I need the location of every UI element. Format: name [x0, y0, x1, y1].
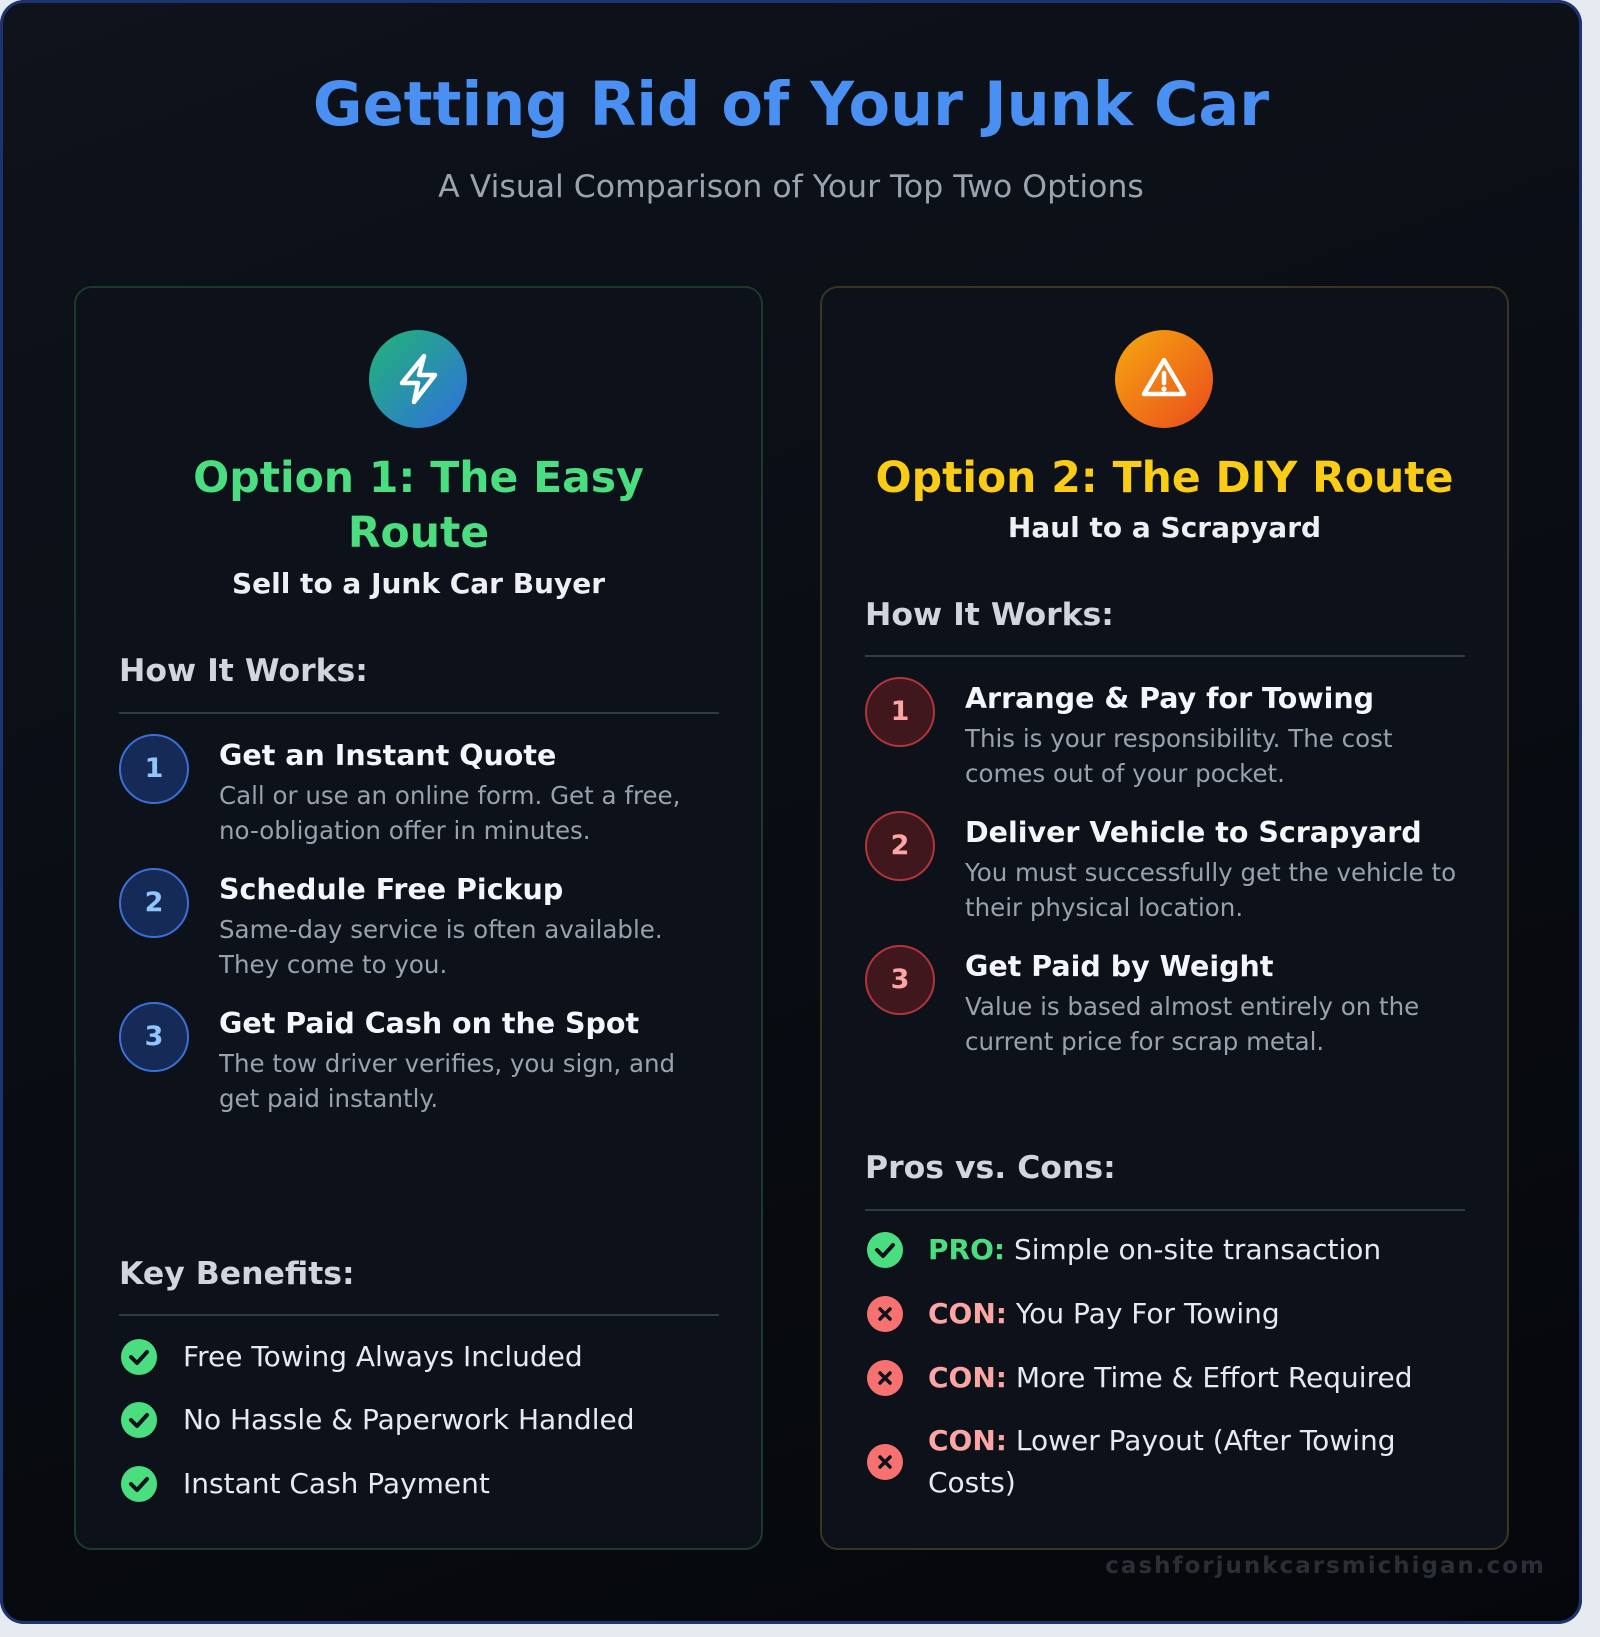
panel: option 1: [74, 286, 763, 1550]
step 3: Get Paid by Weight: [965, 950, 1273, 983]
section heading: pros vs cons: Pros vs. Cons:: [865, 1150, 1116, 1186]
subheading: Haul to a Scrapyard: [1008, 511, 1321, 544]
pro item: PRO: Simple on-site transaction: [928, 1233, 1381, 1266]
step 2: [119, 868, 663, 979]
con item 3: [867, 1424, 1396, 1499]
step 2: 2: [891, 830, 909, 861]
subheading: Sell to a Junk Car Buyer: [232, 567, 605, 600]
step 2: 2: [145, 887, 163, 918]
step 3: [119, 1002, 675, 1113]
step 1: [119, 734, 680, 845]
step 3: The tow driver verifies, you sign, and: [219, 1049, 675, 1078]
step 2: Schedule Free Pickup: [219, 873, 563, 906]
subtitle: A Visual Comparison of Your Top Two Options: [438, 169, 1144, 205]
step 1: Get an Instant Quote: [219, 739, 556, 772]
step 3: [865, 945, 1419, 1056]
step 1: Call or use an online form. Get a free,: [219, 781, 680, 810]
step 3: current price for scrap metal.: [965, 1027, 1324, 1056]
benefits list: [121, 1339, 634, 1502]
step 3: get paid instantly.: [219, 1084, 438, 1113]
step 1: This is your responsibility. The cost: [965, 724, 1392, 753]
step 3: Value is based almost entirely on the: [965, 992, 1419, 1021]
step 2: Same-day service is often available.: [219, 915, 663, 944]
watermark: cashforjunkcarsmichigan.com: [1105, 1553, 1546, 1579]
step 1: [865, 677, 1392, 788]
panel: option 2: [820, 286, 1509, 1550]
title: Getting Rid of Your Junk Car: [313, 70, 1269, 140]
step 3: Get Paid Cash on the Spot: [219, 1007, 639, 1040]
heading: option 1: Option 1: The Easy: [193, 454, 644, 503]
step 1: comes out of your pocket.: [965, 759, 1285, 788]
benefit 2: No Hassle & Paperwork Handled: [183, 1403, 634, 1436]
icon: lightning bolt: [369, 330, 467, 428]
step 1: no-obligation offer in minutes.: [219, 816, 591, 845]
benefit 3: Instant Cash Payment: [183, 1467, 490, 1500]
heading: option 1: [193, 454, 644, 558]
section heading: key benefits: Key Benefits:: [119, 1256, 355, 1292]
con item 1: CON: You Pay For Towing: [928, 1297, 1280, 1330]
step 3: 3: [145, 1021, 163, 1052]
pros cons list: [867, 1232, 1412, 1499]
step 3: 3: [891, 964, 909, 995]
con item 2: CON: More Time & Effort Required: [928, 1361, 1412, 1394]
con item 3: CON: Lower Payout (After Towing: [928, 1424, 1396, 1457]
step 1: Arrange & Pay for Towing: [965, 682, 1374, 715]
section heading: how it works: How It Works:: [865, 597, 1114, 633]
step 1: 1: [891, 696, 909, 727]
step 1: 1: [145, 753, 163, 784]
step 2: their physical location.: [965, 893, 1243, 922]
benefit 1: Free Towing Always Included: [183, 1340, 583, 1373]
step 2: You must successfully get the vehicle to: [965, 858, 1456, 887]
step 2: [865, 811, 1456, 922]
section heading: how it works: How It Works:: [119, 653, 368, 689]
step 2: Deliver Vehicle to Scrapyard: [965, 816, 1422, 849]
step 2: They come to you.: [219, 950, 447, 979]
heading: option 2: Option 2: The DIY Route: [876, 454, 1453, 503]
heading: option 1: Route: [348, 509, 489, 558]
con item 3: Costs): [928, 1466, 1016, 1499]
icon: warning: [1115, 330, 1213, 428]
